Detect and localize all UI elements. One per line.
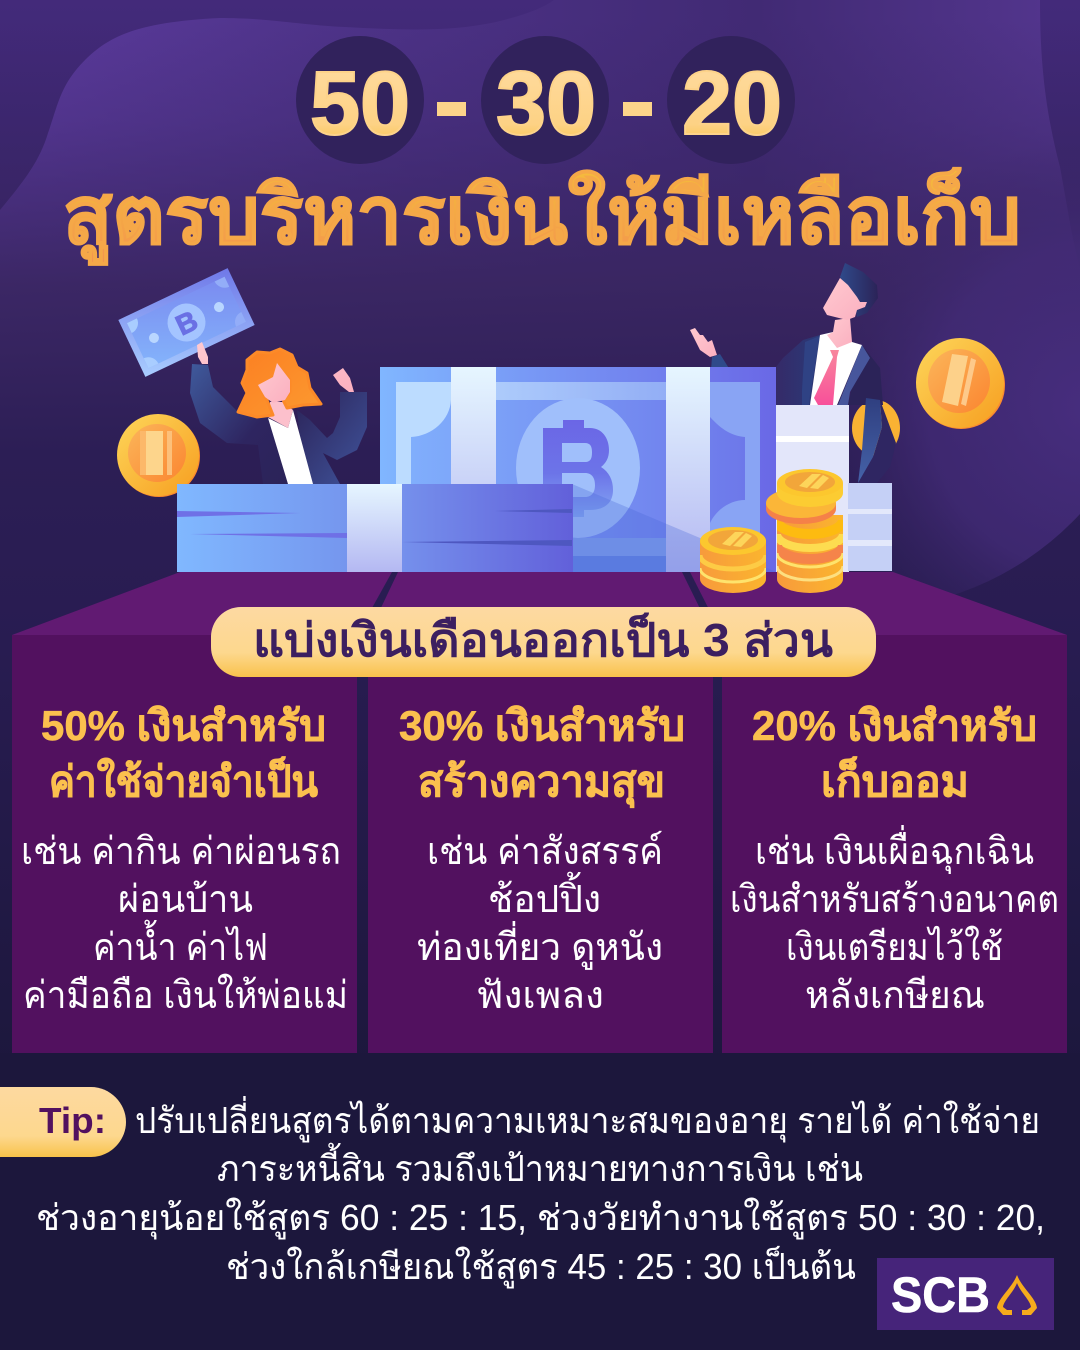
body: 50%: ค่ามือถือ เงินให้พ่อแม่ (23, 974, 348, 1017)
logo: SCB (877, 1258, 1054, 1330)
body: 20%: หลังเกษียณ (805, 975, 985, 1017)
tip badge: Tip: (39, 1100, 106, 1141)
body: 20%: เงินเตรียมไว้ใช้ (786, 926, 1003, 969)
illustration: woman (190, 342, 367, 484)
title: 50-30-20: 20 (682, 54, 782, 154)
body: 50%: ผ่อนบ้าน (118, 879, 253, 921)
body: 30%: เช่น ค่าสังสรรค์ (427, 830, 663, 873)
title: 50-30-20: 50 (310, 54, 410, 154)
banner: divide salary into 3 parts (211, 607, 876, 677)
body: 20%: เช่น เงินเผื่อฉุกเฉิน (755, 825, 1034, 874)
panel: 50% (12, 635, 357, 1053)
tip text: ช่วงใกล้เกษียณใช้สูตร 45 : 25 : 30 เป็นต้น (226, 1244, 856, 1289)
title: 50-30-20 (296, 36, 795, 164)
illustration: banknote stack front (177, 484, 573, 572)
body: 20% (730, 825, 1059, 1017)
panel: 20% (722, 635, 1067, 1053)
heading: 30%: สร้างความสุข (418, 758, 665, 808)
heading: 50%: ค่าใช้จ่ายจำเป็น (49, 756, 318, 805)
illustration: floating banknote: B (171, 305, 203, 341)
tip text: ช่วงอายุน้อยใช้สูตร 60 : 25 : 15, ช่วงวัยทำงานใช้สูตร 50 : 30 : 20, (36, 1197, 1045, 1240)
heading: 50% (41, 702, 326, 805)
logo: SCB: SCB (891, 1267, 990, 1323)
body: 50%: เช่น ค่ากิน ค่าผ่อนรถ (21, 831, 341, 873)
tip text: ภาระหนี้สิน รวมถึงเป้าหมายทางการเงิน เช่น (217, 1142, 863, 1189)
heading: 30% (399, 702, 685, 808)
body: 30% (417, 830, 663, 1017)
body: 30%: ฟังเพลง (476, 975, 604, 1017)
heading: 20%: 20% เงินสำหรับ (752, 702, 1037, 749)
heading: 20%: เก็บออม (821, 756, 969, 805)
tip badge (0, 1087, 126, 1157)
illustration: coin stacks (700, 469, 843, 593)
title: 50-30-20: 30 (496, 54, 596, 154)
illustration: gold coin behind man (852, 400, 900, 456)
panel: 30% (368, 635, 713, 1053)
heading: 20% (752, 702, 1037, 805)
illustration: man (690, 263, 896, 483)
heading: 30%: 30% เงินสำหรับ (399, 702, 685, 749)
heading: 50%: 50% เงินสำหรับ (41, 702, 326, 749)
body: 50%: ค่าน้ำ ค่าไฟ (93, 919, 268, 969)
tip text (36, 1096, 1045, 1289)
banner: divide salary into 3 parts: แบ่งเงินเดือนออกเป็น 3 ส่วน (253, 612, 834, 666)
illustration: small white stacks (776, 405, 892, 572)
body: 30%: ช้อปปิ้ง (488, 871, 601, 921)
illustration: gold coin left (117, 414, 200, 497)
body: 30%: ท่องเที่ยว ดูหนัง (417, 921, 663, 970)
illustration: floating banknote (118, 268, 255, 377)
illustration: big banknote (380, 367, 776, 572)
body: 50% (21, 831, 348, 1017)
platforms (12, 572, 1067, 635)
illustration: gold coin right (916, 338, 1005, 429)
title: Thai subtitle: สูตรบริหารเงินให้มีเหลือเก็บ (63, 167, 1021, 266)
tip text: ปรับเปลี่ยนสูตรได้ตามความเหมาะสมของอายุ รายได้ ค่าใช้จ่าย (135, 1096, 1040, 1143)
